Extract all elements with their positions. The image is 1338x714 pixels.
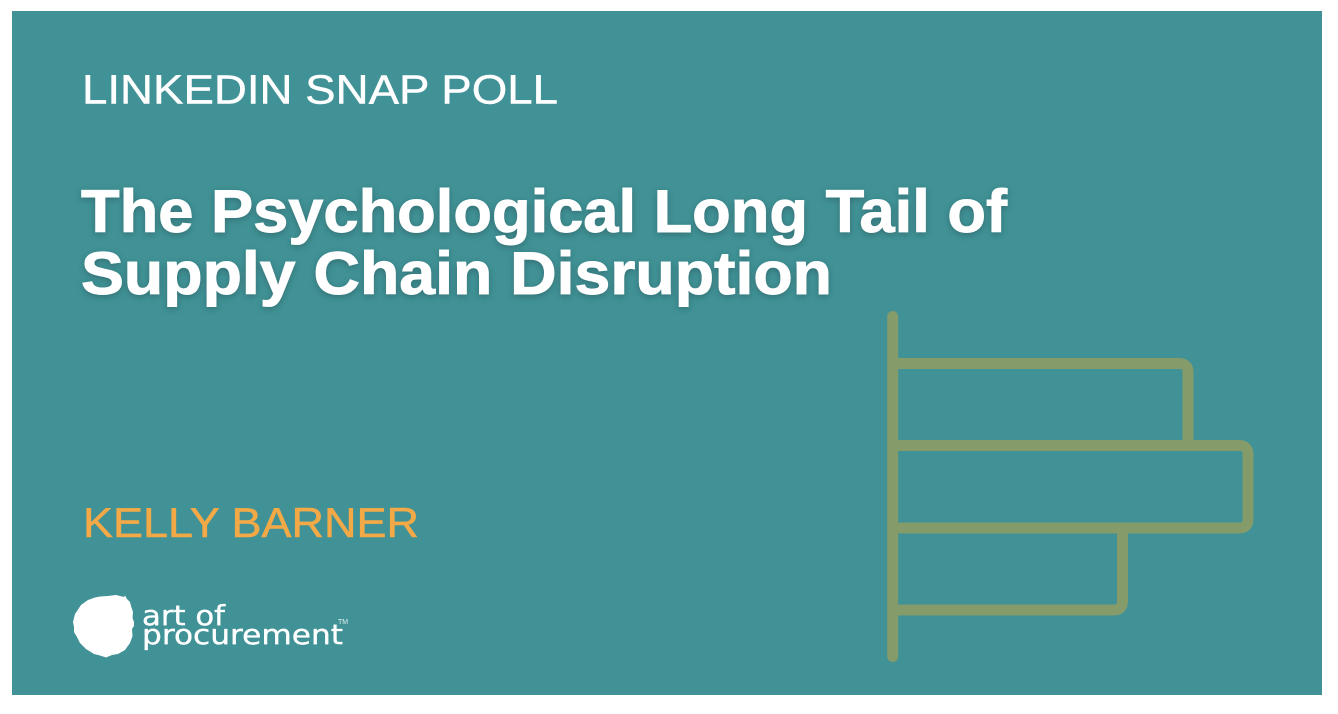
logo: art of procurement [73, 595, 348, 658]
axis [887, 316, 898, 656]
icon: horizontal bar chart outline [893, 316, 1248, 656]
icon: white ink blot [73, 595, 134, 658]
eyebrow: LinkedIn Snap Poll: LINKEDIN SNAP POLL [82, 66, 558, 112]
wordmark [142, 599, 348, 651]
middle bar [893, 446, 1248, 528]
title: Supply Chain Disruption [81, 240, 832, 307]
author: Kelly Barner: KELLY BARNER [83, 499, 419, 546]
title: The Psychological Long Tail of [81, 178, 1008, 245]
bottom bar [893, 528, 1122, 610]
title [81, 178, 1008, 307]
wordmark: procurement [142, 618, 343, 651]
wordmark: TM [338, 619, 348, 626]
top bar [893, 364, 1188, 446]
wordmark: art of [142, 599, 226, 632]
